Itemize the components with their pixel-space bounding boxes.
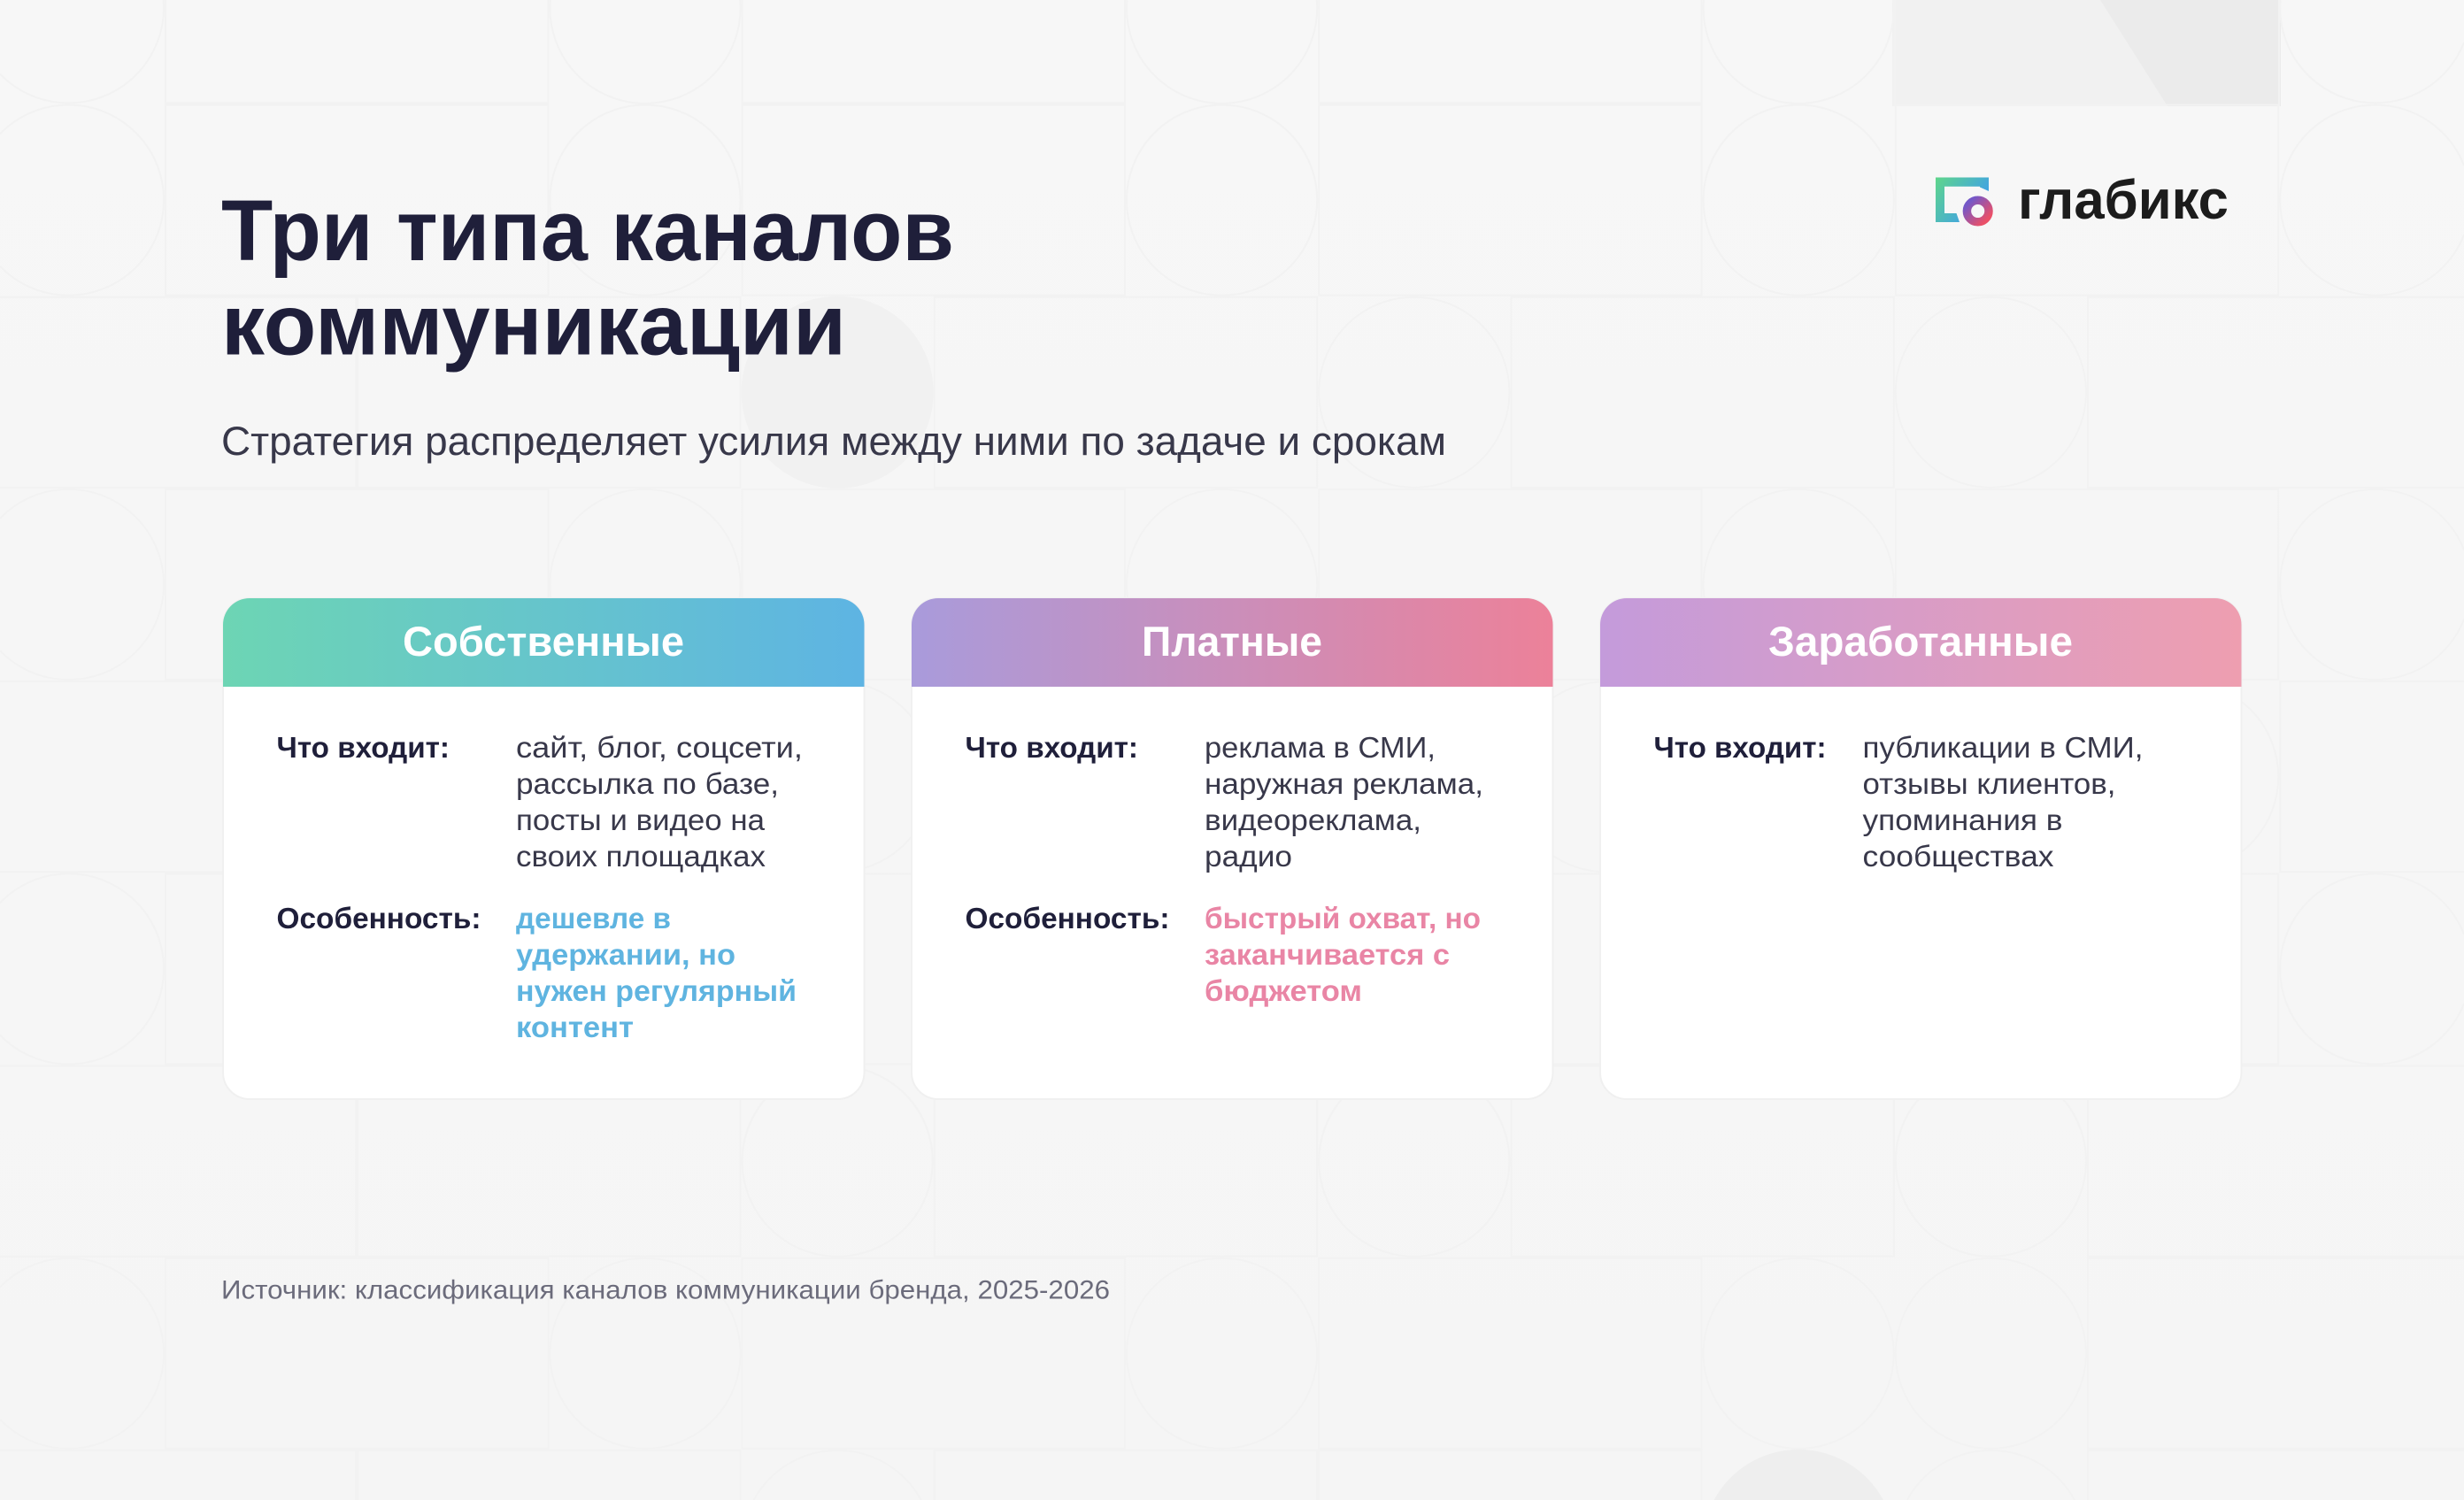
- row: what is included: [276, 731, 803, 873]
- row: feature: [965, 902, 1481, 1007]
- row: feature: контент: [516, 1011, 634, 1043]
- row: what is included: сайт, блог, соцсети,: [516, 731, 803, 764]
- card header: [1600, 598, 2241, 687]
- header label: Собственные: [403, 618, 684, 665]
- row: what is included: видеореклама,: [1205, 804, 1421, 836]
- row: what is included: рассылка по базе,: [516, 767, 779, 800]
- row: what is included: публикации в СМИ,: [1862, 731, 2144, 764]
- title: [221, 182, 954, 373]
- row: what is included: радио: [1205, 840, 1292, 873]
- row: what is included: [965, 731, 1483, 873]
- row: what is included: отзывы клиентов,: [1862, 767, 2115, 800]
- panel: Платные: [912, 598, 1552, 1099]
- row: feature: быстрый охват, но: [1205, 902, 1481, 935]
- row: what is included: [1653, 731, 2144, 873]
- row: feature: заканчивается с: [1205, 938, 1450, 971]
- title: Три типа каналов: [221, 182, 954, 279]
- logo wordmark: глабикс: [2018, 170, 2229, 231]
- row: feature: Особенность:: [276, 902, 481, 935]
- panel: Собственные: [223, 598, 865, 1099]
- panel: Заработанные: [1600, 598, 2241, 1099]
- row: what is included: сообществах: [1862, 840, 2054, 873]
- title: коммуникации: [221, 276, 846, 373]
- row: feature: Особенность:: [965, 902, 1170, 935]
- card header: [223, 598, 865, 687]
- subtitle: Стратегия распределяет усилия между ними по задаче и срокам: [221, 419, 1446, 464]
- row: feature: [276, 902, 797, 1043]
- card body: [912, 598, 1552, 1099]
- row: what is included: своих площадках: [516, 840, 766, 873]
- row: feature: дешевле в: [516, 902, 671, 935]
- row: feature: удержании, но: [516, 938, 735, 971]
- row: what is included: реклама в СМИ,: [1205, 731, 1436, 764]
- card header: [912, 598, 1552, 687]
- icon: logo mark: [1936, 177, 1989, 222]
- row: what is included: Что входит:: [276, 731, 450, 764]
- row: feature: нужен регулярный: [516, 974, 797, 1007]
- source note: Источник: классификация каналов коммуникации бренда, 2025-2026: [221, 1276, 1110, 1304]
- row: what is included: посты и видео на: [516, 804, 766, 836]
- row: what is included: Что входит:: [1653, 731, 1827, 764]
- header label: Платные: [1142, 618, 1322, 665]
- logo: [1936, 170, 2229, 231]
- card body: [1600, 598, 2241, 1099]
- header label: Заработанные: [1768, 618, 2073, 665]
- row: feature: бюджетом: [1205, 974, 1362, 1007]
- row: what is included: Что входит:: [965, 731, 1138, 764]
- row: what is included: наружная реклама,: [1205, 767, 1483, 800]
- row: what is included: упоминания в: [1862, 804, 2062, 836]
- card body: [223, 598, 864, 1099]
